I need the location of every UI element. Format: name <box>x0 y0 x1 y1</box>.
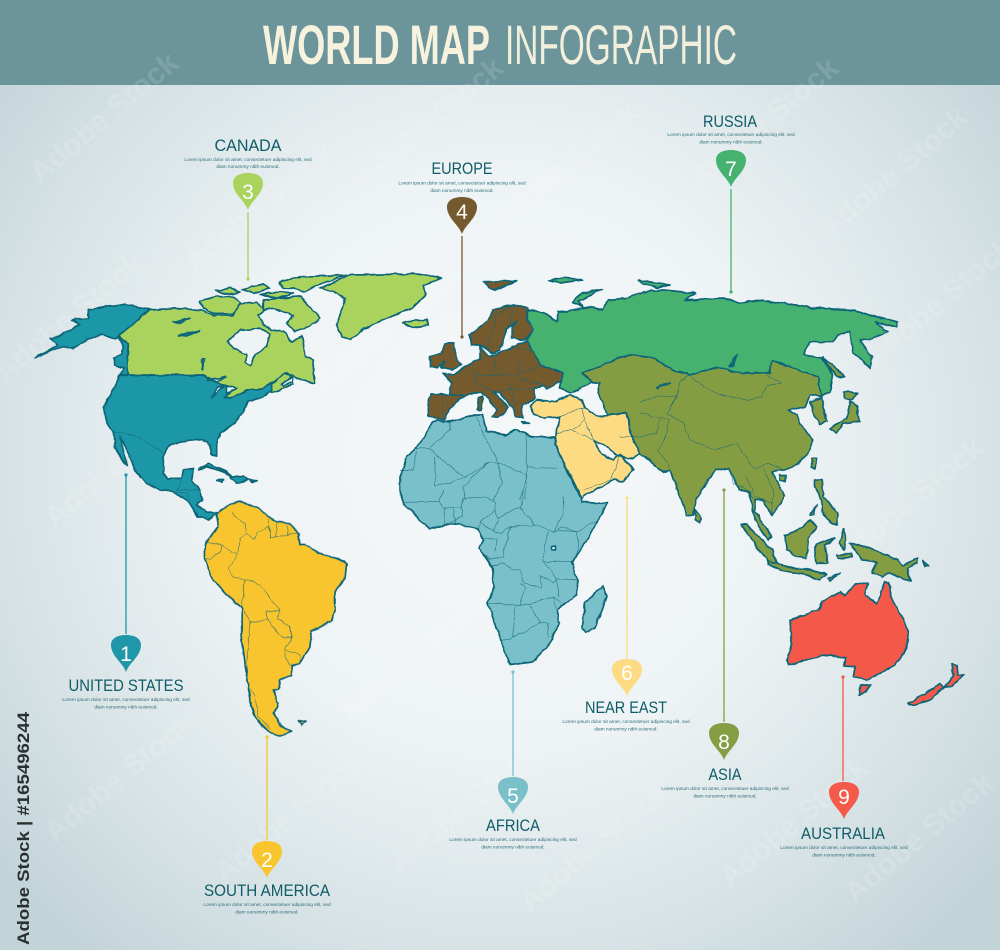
watermarks: Adobe Stock <box>23 46 185 189</box>
callout 5: Africa <box>449 670 577 850</box>
callout 1: United States: UNITED STATES <box>68 676 184 695</box>
watermarks: Adobe Stock <box>333 586 495 729</box>
watermarks: Adobe Stock <box>308 256 470 399</box>
mexico and central america borders <box>115 432 202 503</box>
country borders south <box>403 490 598 642</box>
callout 3: Canada <box>184 136 312 281</box>
callout 8: Asia: diam nonummy nibh euismod. <box>693 794 757 800</box>
callout 5: Africa: diam nonummy nibh euismod. <box>481 844 545 850</box>
country borders <box>557 408 620 490</box>
callout 2: South America <box>203 735 331 916</box>
callout 9: Australia: Lorem ipsum dolor sit amet, consectetuer adipiscing elit, sed <box>780 845 908 851</box>
country borders <box>442 305 543 418</box>
callout 7: Russia: RUSSIA <box>703 112 758 131</box>
Hudson Bay <box>227 328 270 367</box>
title: WORLD MAP <box>263 13 490 76</box>
callout 1: United States: 1 <box>120 643 132 666</box>
callout 7: Russia: 7 <box>725 158 737 181</box>
callout 3: Canada: Lorem ipsum dolor sit amet, consectetuer adipiscing elit, sed <box>184 157 312 163</box>
watermarks: Adobe Stock <box>538 561 700 704</box>
region: Africa <box>400 415 608 665</box>
watermarks: Adobe Stock <box>208 746 370 889</box>
callout 5: Africa: Lorem ipsum dolor sit amet, consectetuer adipiscing elit, sed <box>449 837 577 843</box>
watermarks: Adobe Stock <box>683 51 845 194</box>
callout 7: Russia <box>667 112 795 294</box>
callout 4: Europe: 4 <box>456 201 468 224</box>
watermarks: Adobe Stock <box>178 136 340 279</box>
callout 7: Russia: diam nonummy nibh euismod. <box>699 140 763 146</box>
region: Near East <box>530 395 640 500</box>
region: Russia <box>527 277 898 397</box>
callout 3: Canada: CANADA <box>214 136 282 155</box>
region: United States and Central America <box>35 304 273 520</box>
watermarks: Adobe Stock <box>813 101 975 244</box>
callout 2: South America: Lorem ipsum dolor sit amet, consectetuer adipiscing elit, sed <box>203 902 331 908</box>
callout 9: Australia: AUSTRALIA <box>801 824 886 843</box>
callout 4: Europe: diam nonummy nibh euismod. <box>430 188 494 194</box>
watermarks: Adobe Stock <box>513 776 675 919</box>
callout 1: United States: diam nonummy nibh euismod. <box>94 704 158 710</box>
callout 5: Africa: AFRICA <box>486 816 541 835</box>
country borders north <box>400 415 557 500</box>
Great Lakes <box>207 377 227 382</box>
callout 4: Europe: EUROPE <box>432 159 492 178</box>
callout 8: Asia: 8 <box>718 731 730 754</box>
islands <box>620 357 928 567</box>
callout 1: United States <box>62 473 190 710</box>
callout 8: Asia: Lorem ipsum dolor sit amet, consectetuer adipiscing elit, sed <box>661 786 789 792</box>
world map <box>35 274 964 736</box>
callout 6: Near East: Lorem ipsum dolor sit amet, consectetuer adipiscing elit, sed <box>562 719 690 725</box>
country borders <box>620 372 783 513</box>
callout 6: Near East <box>562 496 690 732</box>
callout 9: Australia: diam nonummy nibh euismod. <box>812 852 876 858</box>
callout 2: South America: 2 <box>261 849 273 872</box>
region: Europe <box>428 281 563 423</box>
callout 7: Russia: Lorem ipsum dolor sit amet, consectetuer adipiscing elit, sed <box>667 132 795 138</box>
callout 3: Canada: diam nonummy nibh euismod. <box>216 164 280 170</box>
callout 5: Africa: 5 <box>507 785 519 808</box>
callout 3: Canada: 3 <box>242 181 254 204</box>
callout 6: Near East: 6 <box>621 662 633 685</box>
region: Asia <box>582 355 928 581</box>
callout 6: Near East: NEAR EAST <box>585 698 667 717</box>
watermarks: Adobe Stock <box>713 751 875 894</box>
callout 9: Australia <box>780 675 908 858</box>
region: South America <box>204 502 347 736</box>
callout 9: Australia: 9 <box>838 786 850 809</box>
callout 4: Europe <box>398 159 526 339</box>
stock credit: Adobe Stock | #165496244 <box>14 711 33 945</box>
callout 2: South America: diam nonummy nibh euismod. <box>235 910 299 916</box>
watermarks: Adobe Stock <box>38 706 200 849</box>
callout 6: Near East: diam nonummy nibh euismod. <box>594 726 658 732</box>
callout 8: Asia <box>661 488 789 800</box>
region: Australia and New Zealand <box>787 582 964 706</box>
lake Baikal <box>730 355 737 367</box>
country borders <box>204 513 300 730</box>
watermarks: Adobe Stock <box>383 736 545 879</box>
region: Canada and Greenland <box>118 274 442 398</box>
watermarks: Adobe Stock <box>838 766 1000 909</box>
title: INFOGRAPHIC <box>505 13 737 76</box>
header banner <box>0 0 1000 85</box>
callout 8: Asia: ASIA <box>708 765 742 784</box>
callout 1: United States: Lorem ipsum dolor sit amet, consectetuer adipiscing elit, sed <box>62 697 190 703</box>
callout 4: Europe: Lorem ipsum dolor sit amet, consectetuer adipiscing elit, sed <box>398 180 526 186</box>
Java and New Guinea <box>767 560 827 580</box>
lake <box>551 546 555 550</box>
watermarks: Adobe Stock <box>483 96 645 239</box>
callout 2: South America: SOUTH AMERICA <box>204 881 331 900</box>
watermarks: Adobe Stock <box>38 391 200 534</box>
watermarks: Adobe Stock <box>828 431 990 574</box>
watermarks: Adobe Stock <box>348 51 510 194</box>
